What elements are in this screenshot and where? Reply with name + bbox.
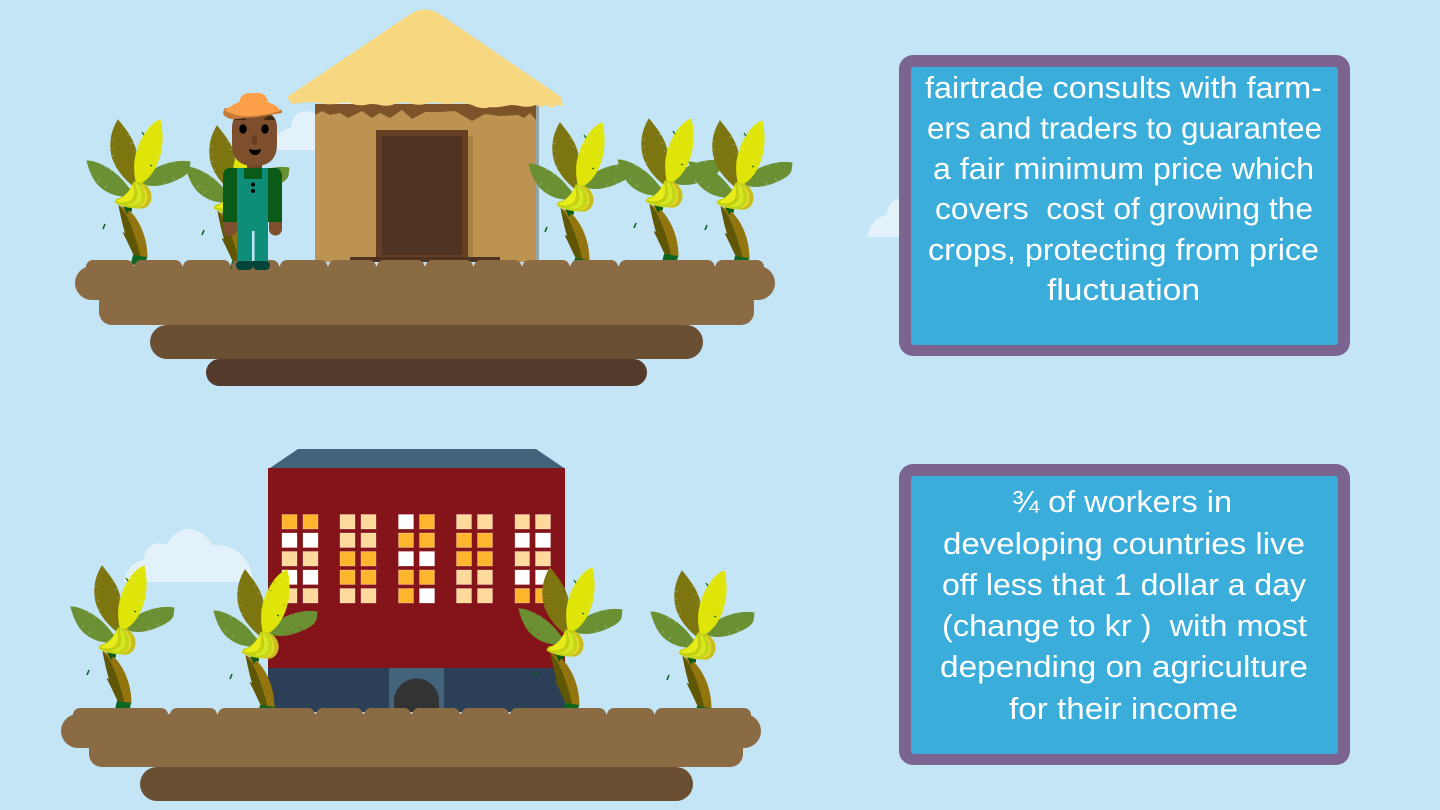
eyes bbox=[239, 124, 269, 134]
panel text: depending on agriculture bbox=[940, 649, 1308, 684]
hat brim underside bbox=[223, 108, 282, 119]
door shadow bbox=[468, 136, 473, 257]
nose bbox=[252, 135, 257, 145]
cloud behind factory bbox=[124, 529, 253, 582]
shirt bbox=[223, 168, 282, 222]
panel fill bbox=[911, 67, 1338, 345]
panel: fair minimum price bbox=[899, 55, 1350, 356]
panel border bbox=[899, 464, 1350, 765]
head bbox=[232, 112, 277, 166]
mouth bbox=[249, 149, 261, 155]
panel text: covers cost of growing the bbox=[935, 191, 1313, 226]
doorstep bbox=[350, 257, 500, 262]
entrance arch bbox=[394, 678, 439, 712]
panel border bbox=[899, 55, 1350, 356]
panel text: a fair minimum price which bbox=[933, 151, 1314, 186]
factory entrance bbox=[389, 668, 444, 712]
bottom floating island bbox=[61, 714, 761, 801]
panel text: for their income bbox=[1009, 691, 1238, 726]
trouser gap bbox=[252, 231, 254, 261]
hut wall shadow bbox=[536, 105, 539, 262]
buttons bbox=[251, 182, 255, 193]
panel text: fluctuation bbox=[1047, 272, 1200, 307]
factory building bbox=[268, 449, 565, 712]
banana plant 7 bbox=[214, 570, 317, 716]
banana plant 4 bbox=[618, 119, 721, 265]
shoes bbox=[236, 261, 270, 270]
hut bbox=[287, 10, 563, 262]
banana plant 9 bbox=[651, 571, 754, 717]
thatch fringe bbox=[315, 104, 536, 121]
farmer bbox=[223, 93, 282, 270]
panel: workers in developing countries bbox=[899, 464, 1350, 765]
panel text: developing countries live bbox=[943, 526, 1305, 561]
panel text: fairtrade consults with farm- bbox=[925, 70, 1322, 105]
hat crown bbox=[239, 93, 268, 109]
panel fill bbox=[911, 476, 1338, 754]
banana plant 3 bbox=[529, 123, 632, 269]
hut wall bbox=[315, 105, 536, 262]
banana plant 5 bbox=[689, 121, 792, 267]
factory windows bbox=[282, 514, 550, 603]
panel text: crops, protecting from price bbox=[928, 232, 1319, 267]
eyebrows bbox=[234, 116, 275, 120]
neck bbox=[247, 162, 262, 170]
panel text bbox=[940, 484, 1308, 726]
bottom island soil scallops bbox=[73, 708, 751, 738]
banana plant 8 bbox=[519, 568, 622, 714]
hands bbox=[223, 218, 282, 236]
banana plant 1 bbox=[87, 120, 190, 266]
cloud behind top text box bbox=[867, 184, 996, 237]
factory roof bbox=[270, 449, 564, 468]
door panel bbox=[382, 136, 462, 255]
banana plant 2 behind farmer bbox=[186, 126, 289, 272]
door frame bbox=[376, 130, 468, 257]
hat brim bbox=[225, 102, 280, 116]
collar bbox=[244, 168, 262, 179]
banana plant 6 bbox=[71, 566, 174, 712]
overalls bbox=[237, 168, 268, 262]
thatched roof bbox=[287, 10, 563, 108]
top floating island bbox=[75, 266, 775, 386]
panel text: ers and traders to guarantee bbox=[927, 110, 1322, 146]
factory wall bbox=[268, 468, 565, 668]
panel text: off less that 1 dollar a day bbox=[942, 567, 1307, 602]
panel text bbox=[925, 70, 1322, 307]
panel text: ¾ of workers in bbox=[1012, 484, 1232, 519]
top island soil scallops bbox=[86, 260, 764, 290]
cloud behind hut bbox=[271, 97, 400, 150]
panel text: (change to kr ) with most bbox=[942, 608, 1307, 643]
factory base bbox=[268, 668, 565, 712]
